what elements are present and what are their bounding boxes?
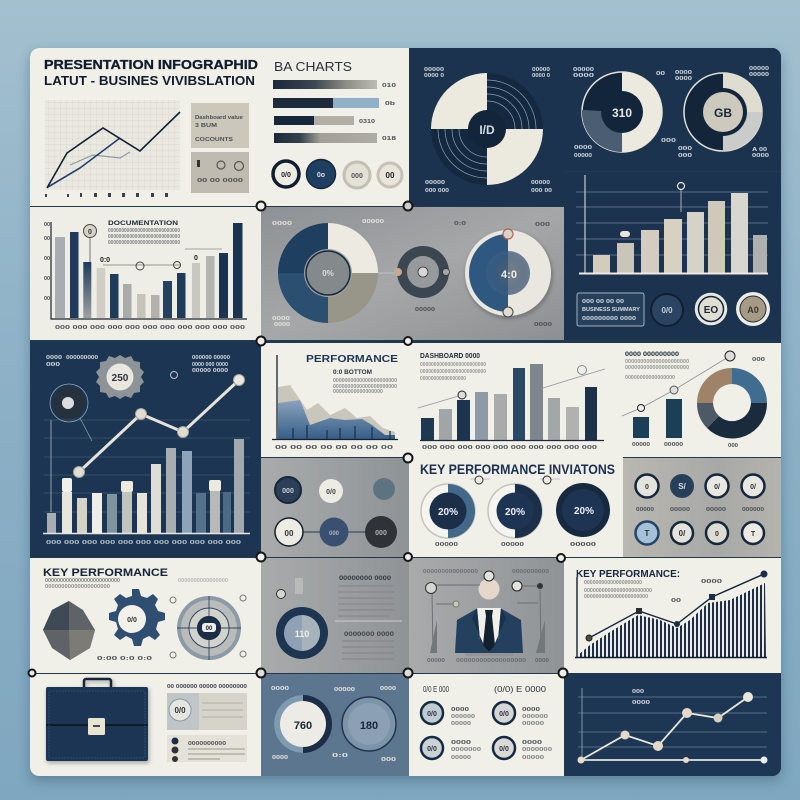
- panel: grey donut charts: [261, 207, 564, 340]
- icon row: 0/0: [281, 172, 291, 179]
- icon circles: 000: [375, 530, 387, 537]
- donut labels: [272, 219, 552, 328]
- panel: column chart: [409, 343, 610, 457]
- donut labels: 0:0: [454, 221, 466, 227]
- pie chart: [431, 73, 543, 185]
- pie labels: 000 000: [425, 188, 449, 194]
- heading: presentation title: PRESENTATION INFOGRAPHID: [44, 57, 258, 72]
- heading: key performance: 00: [671, 598, 681, 604]
- legend text: 0000: [451, 740, 471, 746]
- axis labels: 00: [44, 256, 50, 262]
- area chart: 00 00 00 00 00 00 00 00: [275, 445, 393, 451]
- legend text: 00000: [522, 721, 544, 727]
- top labels: 00000 0000: [192, 368, 228, 374]
- large donut chart: 0%: [322, 269, 334, 278]
- icon: faceted shape: [43, 601, 95, 660]
- legend list: [167, 735, 247, 762]
- icon grid: 0: [715, 531, 719, 538]
- gauge labels: 00000: [334, 687, 355, 693]
- panel: key performance icons: [30, 558, 261, 673]
- captions: 000000000000000000: [456, 658, 526, 664]
- gauge left: [274, 695, 332, 753]
- panel: navy line chart: [564, 674, 781, 776]
- chart annotations: 0:0: [100, 257, 110, 264]
- bars and trend: 00000: [664, 442, 683, 448]
- ring labels: 0000: [573, 73, 594, 79]
- dial: 110: [295, 629, 309, 639]
- panel: legend circles: [409, 674, 564, 776]
- panel: bar charts: [261, 48, 409, 206]
- legend text: 00000: [451, 721, 471, 727]
- gauge 2: [488, 484, 542, 538]
- icon row: 0o: [317, 172, 325, 179]
- line chart: [578, 688, 768, 764]
- panel: business figure: [409, 558, 564, 673]
- donut labels: 0000: [274, 322, 290, 328]
- panel: navy combo chart: [43, 355, 250, 544]
- gauge 3: 20%: [574, 506, 594, 517]
- horizontal bars: 010: [382, 83, 396, 89]
- heading: key performance: KEY PERFORMANCE: [43, 567, 168, 579]
- stat circles: [651, 292, 770, 326]
- text block: [420, 351, 486, 382]
- legend text: 0000: [522, 740, 542, 746]
- ring chart right: GB: [714, 106, 732, 120]
- captions: 00000: [501, 542, 524, 548]
- pie labels: 00000: [424, 67, 444, 73]
- icon grid: T: [751, 531, 756, 538]
- pie labels: 000 00: [531, 188, 552, 194]
- icon grid: T: [645, 529, 650, 538]
- icon grid: 0/: [714, 484, 720, 491]
- chart annotations: 0: [88, 229, 92, 236]
- text block: 000000000000000000000: [625, 365, 689, 371]
- donut labels: 0000: [272, 221, 292, 227]
- pie labels: 00000: [531, 180, 550, 186]
- panel: navy ring charts: [573, 48, 781, 157]
- heading: key performance: 0000000000000000000000: [584, 594, 648, 600]
- icon: gear: [109, 589, 165, 646]
- heading: key performance: 00000000000000000000000: [584, 588, 652, 594]
- heading: key performance: KEY PERFORMANCE:: [576, 569, 680, 580]
- bars and trend: 00000: [632, 442, 650, 448]
- small donut chart: [378, 246, 450, 298]
- text block: 000000000000000000000000000: [108, 240, 180, 246]
- text block: 000000000000000000000000000: [108, 234, 180, 240]
- stat circles: EO: [704, 305, 718, 316]
- gauge labels: 0:0: [332, 753, 348, 759]
- column chart: 000 000 000 000 000 000 000 000 000 000: [422, 445, 597, 451]
- donut labels: 00000: [415, 307, 435, 313]
- gauge 3: [556, 483, 610, 537]
- icon: business person: [455, 578, 523, 656]
- text block: 000000000000000000000000: [420, 362, 486, 368]
- donut labels: 00000: [362, 219, 384, 225]
- bars and trend: 000: [728, 443, 738, 449]
- legend text: 0000: [451, 707, 469, 713]
- text block: 0000 000000000: [625, 352, 680, 358]
- pie labels: 00000: [425, 180, 445, 186]
- ring labels: 0000: [752, 153, 769, 159]
- legend text: 0000000: [522, 747, 552, 753]
- captions: 00000: [435, 542, 458, 548]
- heading: key performance: [576, 569, 722, 604]
- line chart: 000: [632, 689, 644, 695]
- panel: slate gauges: [261, 674, 409, 776]
- text block: [108, 220, 180, 246]
- note box: Dashboard value: [195, 115, 243, 121]
- heading: bar charts: BA CHARTS: [274, 59, 352, 74]
- header labels: [423, 685, 547, 694]
- panel: title and line chart: [30, 48, 262, 206]
- legend text: [451, 707, 552, 761]
- icon grid: 0: [645, 484, 649, 491]
- panel: cream column chart: [30, 207, 261, 340]
- legend text: 00000: [451, 755, 471, 761]
- stat box: 000000000 0000: [582, 316, 636, 322]
- text block: 000000000000000000000000: [420, 369, 486, 375]
- captions: 0:00 0:0 0:0: [97, 656, 152, 662]
- pie labels: 0000 0: [424, 73, 444, 79]
- columns: 000 000 000 000 000 000 000 000 000 000 000: [46, 540, 241, 546]
- stat circles: A0: [747, 305, 759, 315]
- heading: performance: 0000000000000000000000: [333, 378, 397, 384]
- note box: [191, 103, 249, 148]
- panel: area chart: [261, 343, 409, 457]
- ring labels: 00000: [574, 153, 592, 159]
- icon circles: 00: [285, 529, 294, 538]
- icon circles: 000: [329, 531, 340, 537]
- text block: [625, 352, 689, 381]
- line chart: 0000: [632, 700, 650, 706]
- top labels: 000000000: [66, 355, 98, 361]
- ring labels: [573, 66, 769, 159]
- panel: icon grid taupe: [623, 458, 781, 557]
- icon: gear: 0/0: [127, 617, 137, 624]
- captions: 00000: [570, 542, 596, 548]
- area chart: [272, 355, 398, 451]
- legend icons: 0/0: [499, 711, 509, 718]
- icon row: 000: [351, 173, 363, 180]
- heading: performance: 0:0 BOTTOM: [333, 369, 372, 376]
- captions: 0000: [535, 658, 549, 664]
- icon grid: [636, 474, 764, 544]
- ring labels: 00000: [749, 72, 769, 78]
- heading: performance: 0000000000000000000000: [333, 384, 397, 390]
- column chart: [418, 364, 605, 451]
- ring labels: 00: [656, 71, 665, 77]
- ring labels: 0000: [675, 76, 692, 82]
- text block: 0/0: [174, 706, 186, 715]
- striped area chart: [575, 570, 768, 658]
- icon row: [273, 160, 402, 188]
- panel: stripe area chart: [564, 558, 781, 673]
- ring labels: 0000: [675, 70, 692, 76]
- heading: key performance: 00000000000000000000: [45, 584, 110, 590]
- ring chart left: 310: [612, 106, 632, 120]
- axis labels: 00: [44, 296, 50, 302]
- pie labels: [424, 67, 552, 194]
- trend line: [74, 374, 244, 478]
- legend text: 000000: [451, 714, 475, 720]
- top labels: 0000 000 0000: [192, 362, 228, 368]
- icon grid: 000000: [742, 507, 764, 513]
- gauge labels: 0000: [380, 686, 396, 692]
- text block: 0000000 0000: [344, 632, 395, 638]
- ring labels: 000: [678, 146, 692, 152]
- icon: gear: 250: [112, 373, 129, 384]
- gauge right: 180: [360, 720, 378, 732]
- pie chart: I/D: [479, 123, 495, 137]
- pie labels: 0000 0: [532, 73, 550, 79]
- ring labels: 000: [678, 153, 692, 159]
- panel: navy column chart: [576, 175, 770, 327]
- target gauge: [177, 596, 241, 660]
- pins and stands: [426, 571, 545, 653]
- note box: COCOUNTS: [195, 137, 234, 143]
- heading: presentation title: LATUT - BUSINES VIVIBSLATION: [44, 73, 255, 88]
- horizontal bars: 0310: [359, 119, 375, 125]
- gauge labels: 0000: [271, 686, 289, 692]
- heading: key performance: 0000000000000000000000000: [45, 578, 120, 584]
- heading: key performance indicators: KEY PERFORMANCE INVIATONS: [420, 461, 615, 477]
- top labels: [46, 355, 230, 378]
- text block: 00 000000 00000 00000000: [167, 684, 247, 690]
- ring chart right: [684, 73, 762, 151]
- text block: DASHBOARD 0000: [420, 351, 480, 360]
- column chart: [576, 175, 768, 274]
- column chart: [51, 222, 247, 319]
- pie labels: 00000: [532, 67, 550, 73]
- panel: navy pie chart: [424, 67, 552, 192]
- panel: donut and bars: [610, 343, 781, 457]
- icon grid: 00000: [670, 507, 690, 513]
- axis labels: 00: [44, 276, 50, 282]
- ring labels: 000: [661, 138, 676, 144]
- large circle gauge: 4:0: [501, 269, 517, 281]
- icon grid: 0/: [750, 484, 756, 491]
- donut labels: 0000: [272, 316, 290, 322]
- horizontal bars: 0b: [385, 101, 395, 107]
- donut chart: [697, 368, 767, 439]
- text block: [335, 576, 402, 659]
- axis labels: [44, 222, 245, 331]
- gauge 1: [421, 484, 475, 538]
- legend icons: 0/0: [427, 711, 437, 718]
- large circle gauge: [465, 229, 551, 317]
- gauge right: [342, 697, 396, 751]
- captions: [423, 569, 549, 664]
- captions: 0000000000: [512, 569, 549, 575]
- legend icons: 0/0: [427, 746, 437, 753]
- heading: performance: PERFORMANCE: [306, 353, 398, 365]
- text block: 00000000000000000: [420, 376, 466, 382]
- gauge 1: 20%: [438, 507, 458, 518]
- ring labels: 0000: [574, 145, 592, 151]
- icon circles: 0/0: [326, 489, 336, 496]
- horizontal bars: [273, 80, 396, 143]
- text block: 00000000 0000: [339, 576, 392, 582]
- gauge labels: 0000: [272, 755, 288, 761]
- heading: performance: 00000000000000000: [333, 389, 383, 395]
- donut labels: 000: [535, 222, 550, 228]
- panel: briefcase: [30, 674, 261, 776]
- panel: grey dial with text: [261, 558, 409, 673]
- icon grid: S/: [678, 482, 687, 491]
- gauge labels: [271, 686, 396, 763]
- gauge labels: 000: [381, 757, 396, 763]
- captions: [97, 595, 246, 662]
- heading: key performance: 00000000000000000000: [584, 580, 642, 586]
- icon row: 00: [386, 171, 395, 180]
- axis labels: 000 000 000 000 000 000 000 000 000 000 000: [55, 325, 245, 331]
- icon box: 00 00 0000: [197, 178, 243, 184]
- icon circles: 000: [282, 488, 294, 495]
- panel: key performance indicators: [409, 457, 623, 557]
- donut labels: 0000: [534, 322, 552, 328]
- ring labels: 00000: [573, 67, 594, 73]
- text block: [167, 684, 247, 730]
- ring labels: A 00: [752, 147, 767, 153]
- stat circles: 0/0: [661, 306, 673, 315]
- icon grid: 00000: [706, 507, 726, 513]
- gauge left: 760: [294, 720, 312, 732]
- legend text: 000000: [522, 714, 548, 720]
- header labels: (0/0) E 0000: [494, 685, 547, 694]
- heading: presentation title: [44, 60, 258, 85]
- legend icons: [421, 702, 515, 759]
- top labels: 0000: [46, 355, 62, 361]
- legend text: 00000: [522, 755, 544, 761]
- heading: performance: [306, 355, 398, 393]
- icon: gear: [96, 355, 144, 399]
- columns: [43, 420, 250, 546]
- bars and trend: 000: [752, 357, 765, 363]
- legend icons: 0/0: [499, 746, 509, 753]
- bars and trend: [622, 351, 765, 449]
- horizontal bars: 018: [382, 136, 396, 142]
- text block: DOCUMENTATION: [108, 220, 178, 227]
- gauge 2: 20%: [505, 507, 525, 518]
- dial: [276, 578, 328, 659]
- target gauge: 00: [206, 626, 213, 632]
- note box: 3 BUM: [195, 123, 217, 129]
- top labels: 000000 00000: [192, 355, 230, 361]
- ring labels: 00000: [749, 66, 769, 72]
- heading: key performance: [43, 567, 228, 590]
- legend text: 0000000: [451, 747, 481, 753]
- panel: icon grid grey: [261, 458, 409, 557]
- legend text: 0000: [522, 707, 540, 713]
- connector nodes: [28, 202, 568, 678]
- stat box: 000 00 00 00: [582, 299, 624, 305]
- heading: key performance: 0000000000000000: [178, 578, 228, 584]
- header labels: 0/0 E 000: [423, 685, 449, 694]
- heading: key performance: 0000: [701, 579, 722, 585]
- stat box: [577, 293, 644, 326]
- axis labels: 00: [44, 236, 50, 242]
- top labels: 000: [46, 362, 60, 368]
- icon: dial: [50, 384, 92, 500]
- text block: 00000000000000000: [625, 375, 675, 381]
- icon grid: 0/: [679, 529, 686, 538]
- text block: 000000000000000000000000000: [108, 228, 180, 234]
- chart annotations: [84, 224, 222, 270]
- captions: [435, 476, 596, 548]
- ring chart left: [582, 72, 662, 152]
- icon grid: 00000: [636, 507, 654, 513]
- icon: briefcase: [46, 679, 148, 761]
- icon circles: [275, 477, 397, 548]
- line chart: [45, 100, 180, 197]
- icon box: [191, 152, 249, 193]
- captions: 00000: [427, 658, 445, 664]
- stat box: BUSINESS SUMMARY: [582, 307, 641, 313]
- large donut chart: [278, 223, 378, 323]
- chart annotations: 0: [194, 255, 198, 262]
- legend list: 0000000000: [188, 741, 226, 747]
- text block: 000000000000000000000: [625, 359, 689, 365]
- axis labels: 00: [44, 222, 50, 228]
- captions: 000000000000000: [423, 569, 478, 575]
